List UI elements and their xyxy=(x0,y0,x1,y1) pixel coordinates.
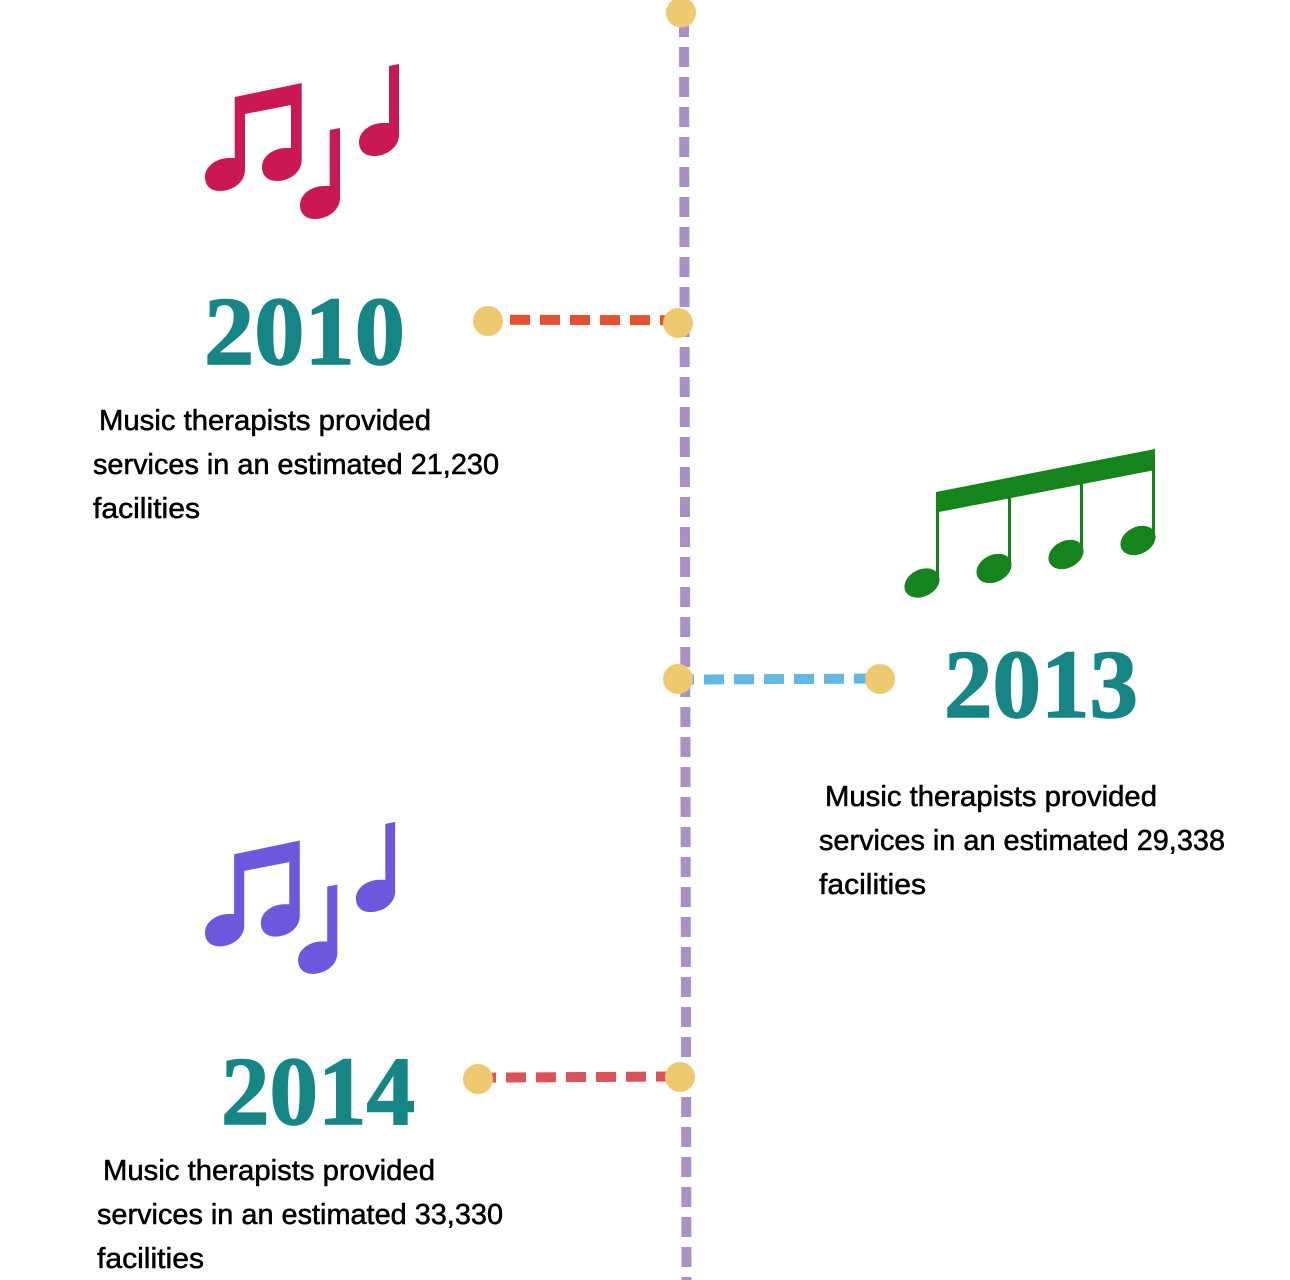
entry: 2013 xyxy=(663,449,1225,901)
text: 2013 description: services in an estimated 29,338 xyxy=(819,825,1225,857)
connector dot: axis xyxy=(663,664,693,694)
entry: 2014 xyxy=(97,822,695,1275)
text: 2013 description: facilities xyxy=(819,869,926,901)
connector: blue dashes xyxy=(674,679,870,680)
text: 2010 description: services in an estimated 21,230 xyxy=(93,449,499,481)
icon: crimson music notes xyxy=(205,64,399,219)
connector dot: axis xyxy=(663,308,693,338)
text: 2010 description: facilities xyxy=(93,493,200,525)
connector: red dashes xyxy=(510,315,668,325)
entry: 2010 xyxy=(93,64,693,525)
connector dot: axis xyxy=(665,1062,695,1092)
timeline start dot xyxy=(666,0,696,28)
year: 2013: 2013 xyxy=(944,631,1138,738)
icon: green beamed notes xyxy=(899,449,1161,603)
connector dot: left xyxy=(473,306,503,336)
icon: purple music notes xyxy=(205,822,395,974)
text: 2013 description xyxy=(819,781,1225,901)
connector dot: right xyxy=(865,664,895,694)
connector: coral dashes xyxy=(476,1076,670,1078)
text: 2014 description: Music therapists provided xyxy=(103,1155,435,1187)
text: 2014 description: services in an estimated 33,330 xyxy=(97,1199,503,1231)
text: 2010 description xyxy=(93,405,499,525)
text: 2013 description: Music therapists provided xyxy=(825,781,1157,813)
text: 2010 description: Music therapists provided xyxy=(99,405,431,437)
text: 2014 description: facilities xyxy=(97,1243,204,1275)
year: 2014: 2014 xyxy=(221,1038,415,1145)
text: 2014 description xyxy=(97,1155,503,1275)
timeline axis xyxy=(684,17,686,1280)
connector dot: left xyxy=(463,1064,493,1094)
year: 2010: 2010 xyxy=(204,278,405,385)
